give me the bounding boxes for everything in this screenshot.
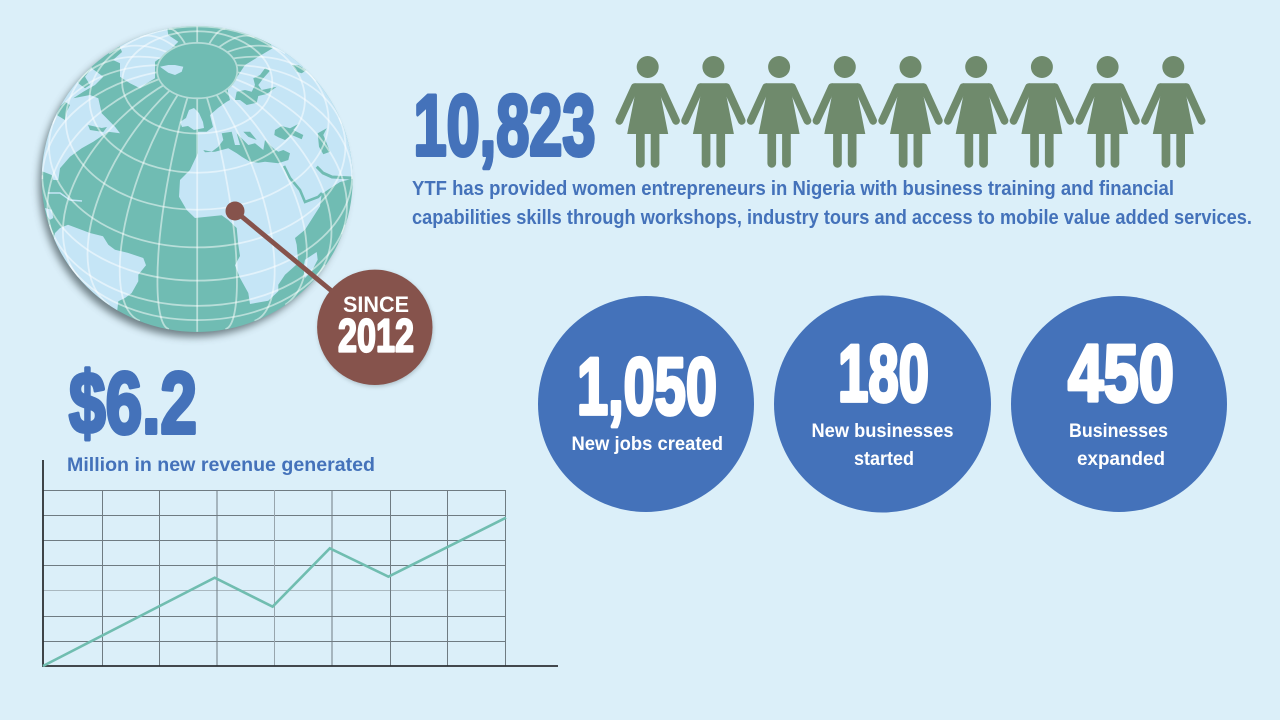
description text: YTF has provided women entrepreneurs in Nigeria with business training and financial — [412, 177, 1174, 200]
row of women icons — [619, 56, 1202, 168]
graticule — [42, 26, 352, 332]
revenue figure: $6.2: $6.2 — [69, 355, 197, 452]
headline number: 10,823: 10,823 — [414, 78, 596, 174]
stat circle: new businesses: New businesses — [812, 420, 954, 442]
stat circle: new jobs — [538, 296, 754, 512]
iceland — [160, 65, 183, 75]
stat circle: new jobs: 1,050 — [577, 342, 717, 432]
polar cap — [157, 43, 237, 98]
stat circle: new businesses: started — [854, 448, 914, 470]
stat circle: businesses expanded: expanded — [1077, 448, 1165, 470]
inland seas — [57, 65, 352, 202]
axes — [43, 460, 558, 666]
globe — [42, 26, 353, 332]
badge: since 2012: 2012 — [338, 309, 414, 361]
land masses — [42, 29, 352, 310]
stat circle: new jobs: New jobs created — [572, 433, 723, 455]
stat circle: new businesses: 180 — [838, 329, 929, 419]
stat circle: businesses expanded — [1011, 296, 1227, 512]
globe shadow — [39, 31, 347, 337]
description text — [412, 177, 1252, 229]
ocean — [40, 22, 354, 336]
line chart — [43, 460, 558, 666]
badge: since 2012 — [317, 270, 433, 386]
stat circle: businesses expanded: 450 — [1068, 329, 1174, 419]
revenue trend line — [43, 518, 506, 666]
badge: since 2012: SINCE — [343, 292, 409, 317]
pointer line from Nigeria to badge — [226, 202, 345, 302]
stat circle: new businesses — [774, 296, 991, 512]
stat circle: businesses expanded: Businesses — [1069, 420, 1168, 442]
revenue caption: Million in new revenue generated — [67, 454, 375, 476]
